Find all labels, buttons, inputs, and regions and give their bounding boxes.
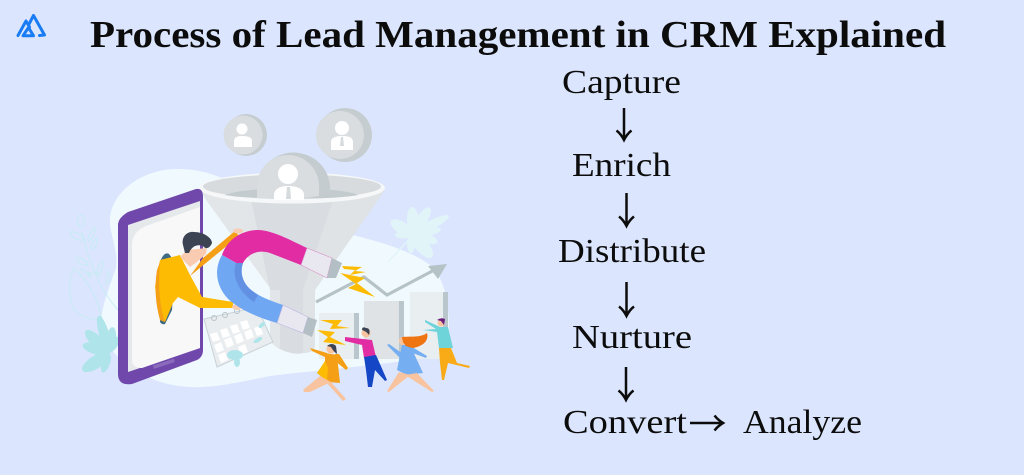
- background blob: [101, 169, 449, 387]
- horseshoe magnet: [217, 230, 342, 337]
- person in blue dress with red hair: [387, 333, 434, 392]
- step: Analyze: Analyze: [743, 404, 862, 441]
- title: Process of Lead Management in CRM Explained: [90, 14, 946, 56]
- illustration: lead funnel and magnet: [70, 108, 470, 401]
- step: Nurture: Nurture: [572, 319, 692, 356]
- step: Enrich: Enrich: [572, 147, 671, 184]
- phone: [118, 189, 203, 384]
- person in teal shirt and yellow trousers: [423, 318, 470, 380]
- teal leaf bottom left: [79, 314, 122, 376]
- decorative line plant left: [70, 215, 118, 320]
- person in orange dress: [303, 344, 348, 401]
- arrow: Convert to Analyze: [690, 416, 723, 430]
- funnel: [199, 172, 385, 354]
- calendar: [204, 306, 273, 367]
- person reaching out of phone: [155, 228, 243, 324]
- step: Convert: Convert: [563, 404, 688, 441]
- arrow: Capture to Enrich: [616, 108, 632, 140]
- step: Capture: Capture: [562, 64, 681, 101]
- bar chart with rising arrow: [316, 264, 448, 359]
- lead avatar top right: [316, 108, 372, 162]
- teal leaf right: [388, 205, 451, 262]
- person in pink shirt: [345, 327, 387, 387]
- arrow: Nurture to Convert: [618, 367, 634, 400]
- step: Distribute: Distribute: [558, 233, 706, 270]
- icon: brand logo: [18, 16, 44, 36]
- lead avatar in funnel: [257, 153, 330, 200]
- arrow: Enrich to Distribute: [619, 193, 634, 226]
- arrow: Distribute to Nurture: [619, 282, 634, 316]
- lightning bolts: [317, 266, 375, 345]
- lead avatar top left: [224, 114, 267, 156]
- process flow: [558, 64, 862, 441]
